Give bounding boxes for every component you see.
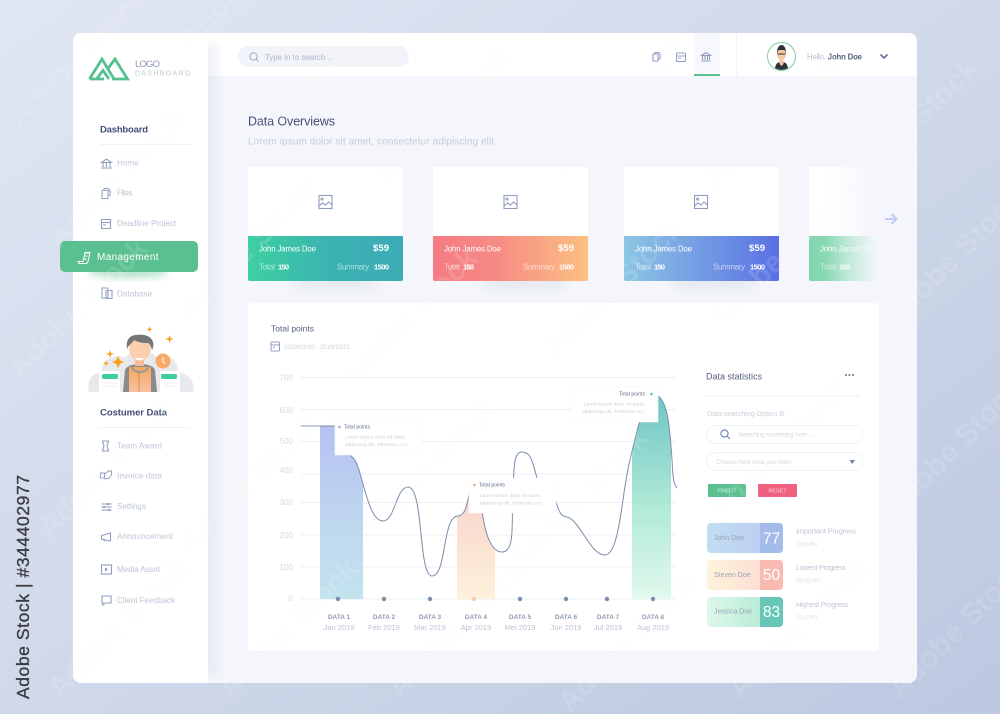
data statistics panel: Data searching Option B : [707, 409, 788, 418]
x axis labels: Apr 2019 [461, 623, 491, 632]
nav: settings: Settings [117, 502, 146, 511]
tooltip 3 [572, 387, 658, 422]
card 3: 1500 [750, 262, 765, 272]
header icons [653, 52, 710, 62]
x axis labels: Jan 2019 [324, 623, 354, 632]
reset button: RESET [768, 488, 787, 494]
card 1: Summary [337, 262, 369, 272]
stock id label: Adobe Stock | #344402977 [13, 475, 33, 699]
nav: files [102, 188, 132, 198]
progress 2: Steven Doe [714, 572, 751, 579]
illustration: character [88, 326, 194, 392]
progress 1: Important Progress [796, 526, 856, 536]
card 3: 150 [654, 262, 665, 272]
user avatar [768, 42, 796, 70]
y axis labels: 300 [280, 498, 294, 507]
nav: announcement: Announcement [117, 532, 174, 541]
card 4 fading: Total [820, 262, 836, 272]
watermark: Adobe Stock [332, 242, 485, 395]
logo [90, 59, 190, 79]
tooltip 1: Lorem ipsum dolor sit amet, [345, 434, 406, 440]
watermark: Adobe Stock [172, 172, 325, 325]
nav: home: Home [117, 158, 139, 168]
management shadow [88, 266, 168, 278]
reset button [758, 484, 797, 497]
card 1: $59 [373, 243, 389, 254]
watermark: Adobe Stock [352, 392, 505, 545]
progress 3: 83 [763, 604, 780, 621]
card 3: Summary [713, 262, 745, 272]
watermark: Adobe Stock [212, 552, 365, 705]
watermark: Adobe Stock [537, 212, 690, 365]
progress 3: Jessica Doe [714, 608, 752, 616]
card 3: John James Doe [635, 244, 692, 254]
x axis labels [324, 614, 669, 632]
card 1: 1500 [374, 262, 389, 272]
tooltip 2 [469, 478, 556, 513]
watermark: Adobe Stock [702, 182, 855, 335]
card 1: Total [259, 262, 275, 272]
tooltip 2: Total points [479, 482, 506, 488]
card 4 fading: John James Doe [820, 244, 877, 254]
top header bar [208, 33, 917, 76]
y axis labels: 500 [280, 437, 294, 446]
data statistics panel: Data statistics [706, 372, 762, 382]
nav: management active [60, 241, 198, 272]
watermark: Adobe Stock [212, 32, 365, 185]
user greeting: Hello, John Doe [807, 52, 863, 62]
x axis labels: Aug 2019 [637, 623, 669, 632]
x axis labels: Mar 2019 [414, 623, 446, 632]
chart panel [248, 303, 879, 651]
watermark: Adobe Stock [722, 552, 875, 705]
overview heading: Data Overviews [248, 114, 335, 128]
x axis labels: DATA 1 [328, 614, 351, 621]
progress 1: 77 [763, 530, 780, 548]
card 3: Total [635, 262, 651, 272]
progress 2: 05:45 AM [796, 578, 820, 584]
x axis labels: Feb 2019 [368, 623, 400, 632]
x axis labels: DATA 4 [465, 614, 488, 621]
dropdown field [706, 452, 862, 470]
watermark: Adobe Stock [2, 232, 155, 385]
nav: home [101, 158, 139, 168]
x axis labels: DATA 8 [642, 614, 665, 621]
logo: LOGO [135, 59, 160, 70]
nav: media asset: Media Asset [117, 565, 161, 574]
tooltip 2: Lorem ipsum dolor sit amet, [480, 493, 541, 498]
find button: FIND IT [717, 488, 737, 494]
line chart [280, 374, 677, 632]
nav: database [102, 288, 152, 298]
find button [708, 484, 746, 497]
y axis labels: 600 [280, 406, 294, 415]
sidebar [60, 33, 208, 683]
tooltip 3: adipiscing elit. Pellentes orci [582, 409, 644, 414]
watermark: Adobe Stock [42, 102, 195, 255]
card 3 [624, 167, 779, 281]
logo: DASHBOARD [135, 70, 190, 78]
tooltip 3: Total points [619, 392, 646, 398]
y axis labels: 200 [280, 531, 294, 540]
watermark: Adobe Stock [832, 52, 985, 205]
card 2: 1500 [559, 262, 574, 272]
nav: invoice data: Invoice data [117, 472, 162, 480]
progress 2 [707, 560, 846, 590]
x axis labels: DATA 5 [509, 614, 532, 621]
dropdown field: Choose here what you need [716, 459, 791, 466]
watermark: Adobe Stock [32, 392, 185, 545]
nav: database: Database [117, 290, 152, 298]
y axis labels: 0 [289, 594, 294, 603]
costumer data heading: Costumer Data [100, 408, 168, 418]
progress 1 [707, 523, 856, 553]
card 2 [433, 167, 588, 281]
nav: team award [102, 441, 162, 451]
x axis labels: DATA 2 [373, 614, 396, 621]
card 2: Total [444, 262, 460, 272]
nav: invoice data [100, 471, 162, 480]
card 2: Summary [523, 262, 555, 272]
nav: files: Files [117, 188, 132, 198]
watermark: Adobe Stock [42, 552, 195, 705]
search box: Type in to search .. [265, 53, 332, 62]
y axis labels: 100 [280, 563, 294, 572]
progress 3 [707, 597, 848, 627]
tooltip 2: adipiscing elit. Pellentes orci [480, 500, 542, 506]
x axis labels: Jul 2019 [594, 623, 622, 632]
nav: settings [102, 502, 146, 511]
x axis labels: Jun 2019 [551, 623, 581, 632]
progress 3: 10:15 PM [796, 616, 817, 622]
search field: Searching something here ... [738, 432, 813, 438]
dashboard window [60, 33, 917, 683]
y axis labels: 700 [280, 374, 294, 382]
x axis labels: Mei 2019 [505, 623, 535, 632]
watermark: Adobe Stock [382, 552, 535, 705]
sidebar shadow [198, 44, 218, 674]
progress 2: 50 [763, 567, 780, 584]
tooltip 1: adipiscing elit. Pellentes orci [345, 442, 407, 447]
dashboard heading: Dashboard [100, 124, 148, 136]
date range: 2019/03/10 - 2019/10/21 [284, 345, 351, 351]
chart title: Total points [271, 324, 314, 334]
watermark: Adobe Stock [367, 42, 520, 195]
card 4 fading [809, 160, 886, 285]
nav: client feedback: Client Feedback [117, 596, 176, 605]
nav: team award: Team Award [117, 442, 162, 450]
progress 2: Lowest Progress [796, 563, 846, 572]
x axis dots [336, 597, 655, 601]
progress 1: John Doe [714, 535, 744, 542]
tooltip 3: Lorem ipsum dolor sit amet, [584, 402, 645, 406]
watermark: Adobe Stock [697, 42, 850, 195]
card shadows [295, 276, 755, 288]
card 2: 150 [463, 262, 474, 272]
trend line [301, 395, 677, 576]
x axis labels: DATA 7 [597, 614, 620, 621]
watermark: Adobe Stock [172, 407, 325, 560]
progress 3: Highest Progress [796, 600, 848, 609]
card 2: John James Doe [444, 244, 501, 254]
highlighted bars [320, 395, 671, 599]
date range [271, 342, 351, 351]
nav: management active: Management [97, 252, 159, 263]
watermark: Adobe Stock [542, 32, 695, 185]
overview subtitle: Lorem ipsum dolor sit amet, consectetur adipiscing elit. [248, 136, 497, 148]
chevron [880, 54, 888, 58]
y axis labels [280, 374, 294, 603]
card 1: 150 [278, 262, 289, 272]
watermark: Adobe Stock [502, 422, 655, 575]
next arrow [885, 214, 896, 224]
card 2: $59 [558, 243, 574, 254]
card 4 fading: 150 [839, 262, 850, 272]
x axis labels: DATA 3 [419, 614, 442, 621]
card 1 [248, 167, 403, 281]
search box [238, 46, 409, 67]
tooltip 1 [335, 420, 421, 455]
watermark: Adobe Stock [702, 372, 855, 525]
x axis labels: DATA 6 [555, 614, 578, 621]
search field [706, 426, 862, 444]
nav: deadline project: Deadline Project [117, 219, 177, 228]
tooltip 1: Total points [344, 424, 370, 430]
card 1: John James Doe [259, 244, 316, 254]
card 3: $59 [749, 243, 765, 254]
progress 1: 21:30 PM [796, 542, 817, 548]
y axis labels: 400 [280, 466, 294, 475]
data statistics panel [705, 372, 862, 627]
